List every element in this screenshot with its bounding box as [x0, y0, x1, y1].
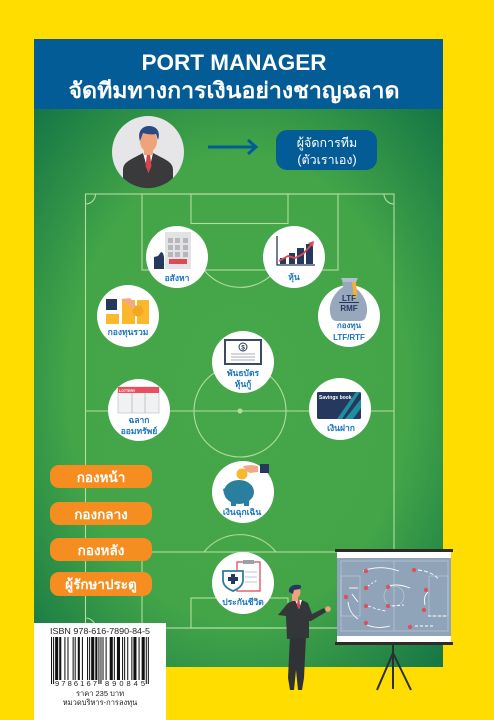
- legend: defence: [50, 538, 152, 561]
- circle: savings deposit: [309, 378, 371, 440]
- circle: LTF / RMF fund: [318, 278, 380, 347]
- circle: mutual fund: กองทุนรวม: [108, 327, 148, 338]
- circle: savings deposit: เงินฝาก: [327, 423, 355, 433]
- circle: bonds: หุ้นกู้: [235, 379, 251, 390]
- circle: mutual fund: [97, 285, 159, 347]
- circle: stocks: หุ้น: [288, 272, 300, 283]
- title banner: จัดทีมทางการเงินอย่างชาญฉลาด: [68, 78, 400, 104]
- legend: forward: กองหน้า: [77, 470, 125, 485]
- icon: team manager portrait: [112, 116, 184, 188]
- circle: bonds: [212, 331, 274, 393]
- circle: savings lottery: ออมทรัพย์: [121, 426, 157, 436]
- circle: emergency fund: เงินฉุกเฉิน: [223, 507, 261, 518]
- barcode panel: [34, 623, 166, 720]
- legend: goalkeeper: ผู้รักษาประตู: [65, 577, 137, 593]
- label: team manager: (ตัวเราเอง): [297, 153, 357, 167]
- legend: midfield: กองกลาง: [74, 507, 128, 522]
- circle: emergency fund: [212, 461, 274, 523]
- circle: LTF / RMF fund: กองทุน: [337, 321, 362, 331]
- circle: LTF / RMF fund: LTF/RTF: [333, 333, 365, 342]
- circle: stocks: [263, 226, 325, 288]
- circle: life insurance: ประกันชีวิต: [222, 597, 264, 607]
- circle: life insurance: [212, 552, 274, 614]
- barcode bars: [51, 637, 149, 684]
- arrow: manager to label: [208, 140, 256, 154]
- circle: LTF / RMF fund: RMF: [340, 304, 358, 313]
- title banner: [34, 39, 443, 109]
- legend: goalkeeper: [50, 572, 152, 596]
- barcode panel: ISBN 978-616-7890-84-5: [50, 626, 150, 636]
- title banner: PORT MANAGER: [142, 50, 326, 75]
- circle: real estate: อสังหา: [165, 273, 190, 283]
- circle: savings lottery: LOTTERY: [119, 389, 136, 393]
- circle: savings lottery: [108, 379, 170, 441]
- circle: bonds: $: [241, 344, 245, 352]
- label: team manager: ผู้จัดการทีม: [297, 136, 357, 151]
- circle: savings deposit: Savings book: [319, 395, 352, 401]
- legend: forward: [50, 465, 152, 488]
- barcode panel: 890845: [105, 679, 145, 688]
- figure: presenter man: [278, 585, 331, 690]
- legend: midfield: [50, 502, 152, 525]
- legend: defence: กองหลัง: [78, 543, 124, 558]
- barcode panel: 9786167: [55, 679, 97, 688]
- panel: football field: [34, 109, 443, 667]
- barcode panel: ราคา 235 บาท: [76, 689, 124, 698]
- tactics board: [335, 549, 453, 690]
- circle: real estate: [146, 226, 208, 288]
- circle: LTF / RMF fund: LTF: [342, 294, 356, 303]
- circle: savings lottery: ฉลาก: [129, 415, 149, 425]
- circle: bonds: พันธบัตร: [227, 368, 259, 378]
- label: team manager: [276, 130, 377, 170]
- barcode panel: หมวดบริหาร-การลงทุน: [63, 698, 137, 707]
